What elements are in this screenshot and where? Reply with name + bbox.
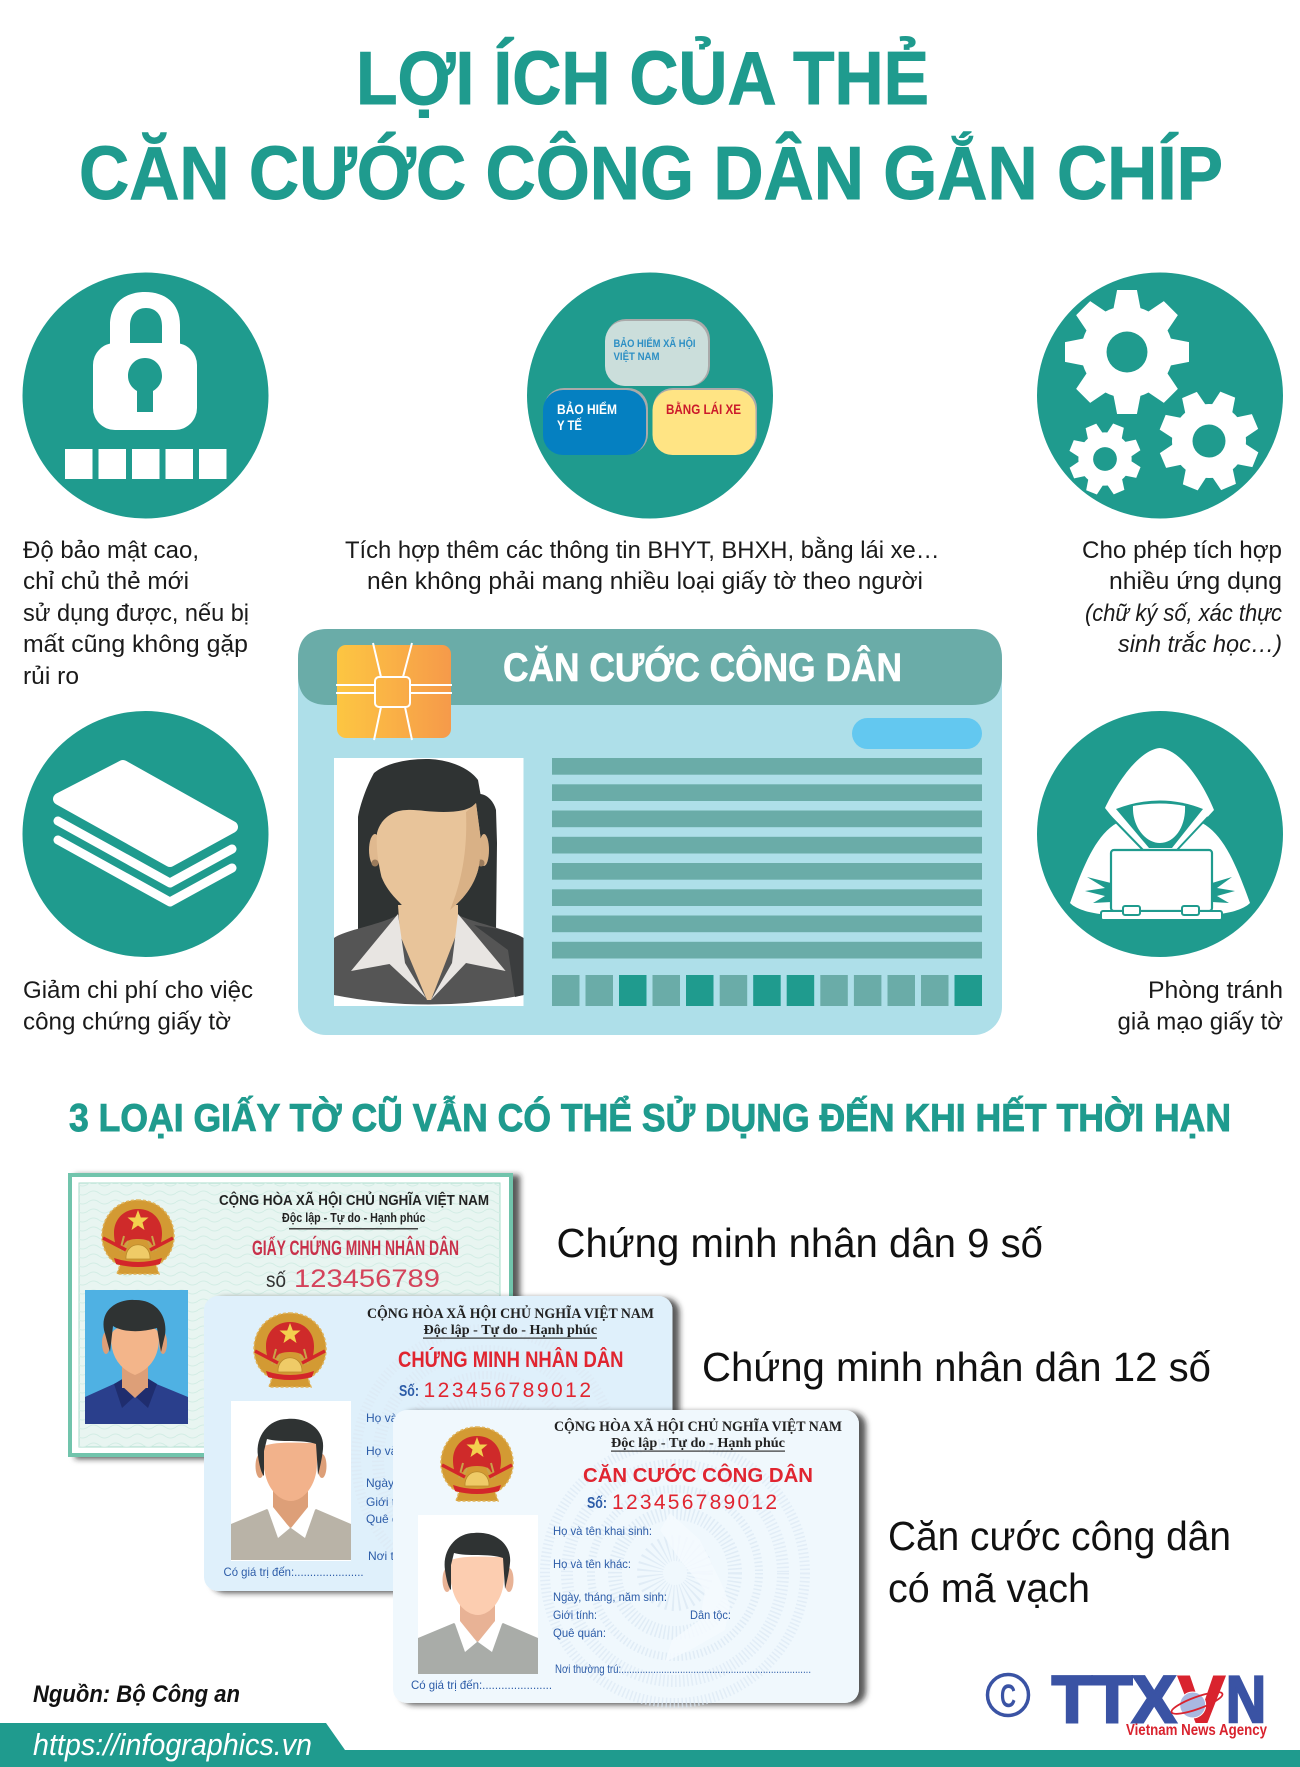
card text: 123456789012	[612, 1491, 777, 1514]
card text: Ngày	[366, 1476, 394, 1490]
label: 9-digit ID: Chứng minh nhân dân 9 số	[556, 1220, 1043, 1266]
title: CĂN CƯỚC CÔNG DÂN GẮN CHÍP	[79, 131, 1223, 215]
card text: Họ và tên khác:	[553, 1557, 631, 1571]
text: security description: Độ bảo mật cao,	[23, 537, 199, 564]
panel: applications benefit	[1037, 272, 1283, 658]
card text: CĂN CƯỚC CÔNG DÂN	[583, 1463, 813, 1487]
icon: insurance and licence cards	[527, 272, 773, 518]
card text: CỘNG HÒA XÃ HỘI CHỦ NGHĨA VIỆT NAM	[219, 1191, 489, 1209]
footer band	[0, 1723, 1300, 1767]
card text: CỘNG HÒA XÃ HỘI CHỦ NGHĨA VIỆT NAM	[367, 1304, 654, 1322]
emblem	[441, 1427, 513, 1501]
source: Nguồn: Bộ Công an	[33, 1681, 240, 1708]
text: security description: chỉ chủ thẻ mới	[23, 568, 189, 595]
text: security description: rủi ro	[23, 663, 79, 690]
old ID: 9-digit card	[68, 1173, 513, 1457]
icon: insurance and licence cards: Y TẾ	[557, 417, 582, 433]
text: security description: sử dụng được, nếu bị	[23, 600, 249, 627]
card text	[219, 1191, 489, 1293]
card text: Độc lập - Tự do - Hạnh phúc	[282, 1210, 426, 1225]
card text: Họ và tên khai sinh:	[553, 1524, 652, 1538]
text: applications description: sinh trắc học…)	[1118, 631, 1282, 658]
icon: stack of papers	[22, 711, 268, 957]
card text: số	[266, 1269, 286, 1292]
text: security description: mất cũng không gặp	[23, 631, 248, 658]
current barcode citizen ID card	[393, 1410, 859, 1703]
card text: Số:	[587, 1495, 607, 1512]
icon: insurance and licence cards: BẰNG LÁI XE	[666, 402, 741, 417]
text: forgery description: giả mạo giấy tờ	[1118, 1008, 1283, 1036]
icon: hooded hacker with laptop	[1037, 711, 1283, 957]
card text: Họ và tên	[366, 1411, 417, 1425]
title	[79, 36, 1223, 215]
icon: insurance and licence cards: VIỆT NAM	[614, 350, 660, 363]
portrait: beige sweater	[231, 1401, 351, 1561]
card text: Độc lập - Tự do - Hạnh phúc	[611, 1436, 785, 1451]
text: forgery description: Phòng tránh	[1148, 977, 1283, 1004]
card text: Dân tộc:	[690, 1608, 731, 1622]
label: barcode citizen ID: có mã vạch	[888, 1565, 1090, 1611]
portrait: blue background	[85, 1290, 188, 1424]
card text: Nơi thường trú:.......................................................................	[555, 1662, 811, 1676]
panel: security benefit	[22, 272, 268, 690]
card text: 123456789012	[424, 1379, 591, 1402]
icon: insurance and licence cards: BẢO HIỂM	[557, 400, 617, 417]
card text: 123456789	[294, 1265, 440, 1293]
text: integration description: nên không phải mang nhiều loại giấy tờ theo người	[367, 568, 923, 595]
card text	[411, 1417, 842, 1692]
emblem	[254, 1313, 326, 1387]
card text: Quê quán:	[553, 1626, 606, 1640]
card text: Nơi thường	[368, 1549, 430, 1563]
website url: https://infographics.vn	[33, 1727, 312, 1762]
illustration: chip ID card	[298, 629, 1002, 1035]
panel: cost benefit	[22, 711, 268, 1036]
card text: Độc lập - Tự do - Hạnh phúc	[424, 1323, 597, 1338]
card text	[224, 1304, 654, 1579]
card text: Số:	[399, 1383, 419, 1400]
card text: Giới tính	[366, 1495, 412, 1509]
portrait: woman	[334, 758, 524, 1006]
logo: TTXVN	[988, 1662, 1267, 1739]
card text: CHỨNG MINH NHÂN DÂN	[398, 1347, 624, 1372]
text: integration description: Tích hợp thêm các thông tin BHYT, BHXH, bằng lái xe…	[345, 537, 940, 564]
card heading: CĂN CƯỚC CÔNG DÂN	[503, 644, 902, 690]
logo: TTXVN: C	[1000, 1678, 1016, 1714]
icon: golden chip	[336, 643, 452, 740]
info bars	[552, 758, 982, 958]
text: applications description: (chữ ký số, xác thực	[1085, 600, 1282, 627]
logo: TTXVN: N	[1226, 1662, 1266, 1736]
logo: TTXVN: V	[1178, 1662, 1225, 1736]
card text: Quê quán	[366, 1512, 419, 1526]
icon: gears	[1037, 272, 1283, 518]
text: forgery description	[1118, 977, 1283, 1036]
text: applications description: Cho phép tích hợp	[1082, 537, 1282, 564]
label: barcode citizen ID	[888, 1513, 1231, 1611]
card text: Có giá trị đến:......................	[224, 1565, 364, 1579]
barcode squares	[552, 975, 982, 1006]
card text: Ngày, tháng, năm sinh:	[553, 1590, 667, 1604]
card text: CỘNG HÒA XÃ HỘI CHỦ NGHĨA VIỆT NAM	[554, 1417, 842, 1435]
text: cost description: công chứng giấy tờ	[23, 1008, 231, 1036]
title: LỢI ÍCH CỦA THẺ	[356, 36, 929, 120]
text: security description	[23, 537, 249, 690]
panel: forgery prevention benefit	[1037, 711, 1283, 1036]
icon: insurance and licence cards: BẢO HIỂM XÃ HỘI	[614, 337, 696, 350]
card text: Có giá trị đến:......................	[411, 1678, 552, 1692]
icon: padlock	[22, 272, 268, 518]
text: applications description: nhiều ứng dụng	[1109, 568, 1282, 595]
old ID: 12-digit card	[204, 1296, 672, 1591]
card header band	[298, 629, 1002, 705]
text: cost description: Giảm chi phí cho việc	[23, 977, 253, 1004]
blue pill	[852, 718, 982, 749]
card text: Giới tính:	[553, 1608, 597, 1622]
text: cost description	[23, 977, 253, 1036]
label: 12-digit ID: Chứng minh nhân dân 12 số	[702, 1344, 1211, 1390]
card text: Họ và tên	[366, 1444, 417, 1458]
label: barcode citizen ID: Căn cước công dân	[888, 1513, 1231, 1559]
text: integration description	[345, 537, 940, 595]
card text: GIẤY CHỨNG MINH NHÂN DÂN	[252, 1236, 459, 1260]
panel: integration benefit	[345, 272, 940, 595]
emblem	[102, 1200, 174, 1274]
logo: TTXVN: Vietnam News Agency	[1126, 1722, 1267, 1739]
portrait: grey sweater	[418, 1515, 538, 1674]
logo: TTXVN: TTX	[1052, 1662, 1176, 1736]
text: applications description	[1082, 537, 1282, 658]
